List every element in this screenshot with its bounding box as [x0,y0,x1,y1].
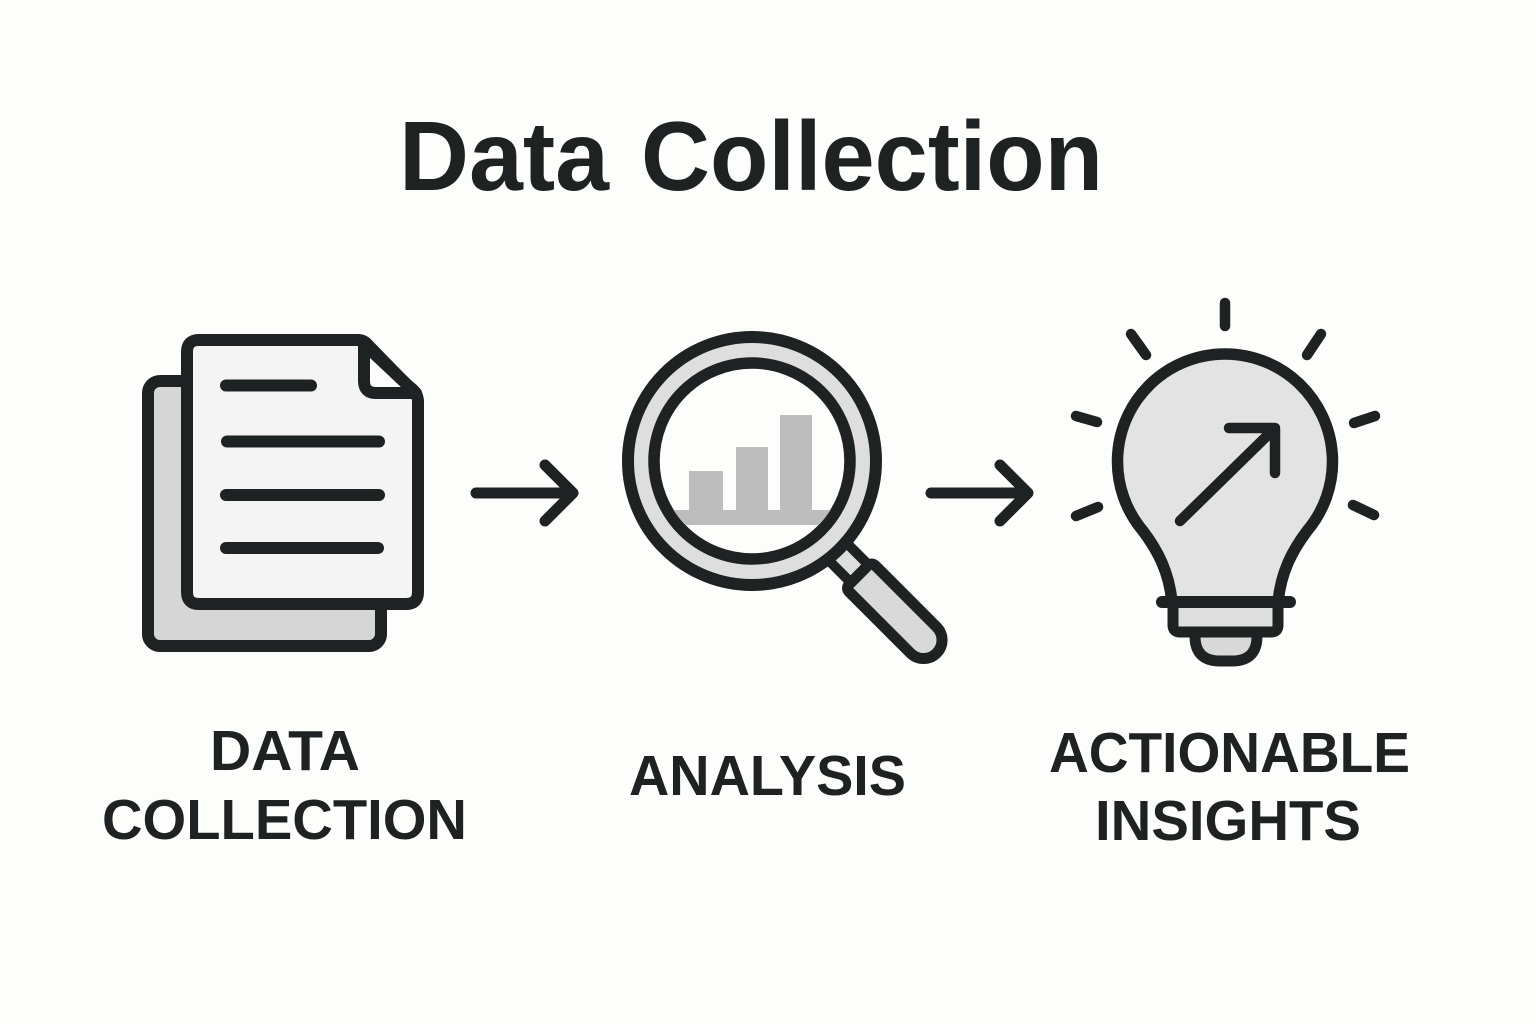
bar chart [674,415,830,525]
icon: magnifying glass with bar chart [628,337,950,666]
title: Collection [641,101,1103,211]
light rays [1076,303,1375,516]
label: data collection: DATA [210,719,360,783]
label: data collection: COLLECTION [102,788,467,852]
icon: stacked documents [148,340,418,646]
folded corner [364,344,416,393]
back page [148,381,381,646]
bulb socket [1173,602,1278,632]
arrow: analysis to insights [931,465,1028,521]
arrow: collection to analysis [476,465,573,521]
glass bulb [1117,354,1332,602]
label: actionable insights [1049,721,1410,853]
magnifier handle [845,562,950,666]
bulb cap [1195,631,1257,661]
label: data collection [102,719,467,852]
bulb collar [1162,596,1290,608]
label: analysis: ANALYSIS [629,744,906,808]
label: actionable insights: INSIGHTS [1095,789,1361,853]
title: Data [399,101,610,211]
lens glass [654,363,850,559]
growth arrow [1180,428,1275,521]
lens ring [628,337,876,585]
front page [187,340,418,604]
text lines [226,386,379,548]
title [399,101,1103,211]
label: actionable insights: ACTIONABLE [1049,721,1410,785]
icon: light bulb with growth arrow [1076,303,1375,661]
magnifier neck [823,537,871,585]
